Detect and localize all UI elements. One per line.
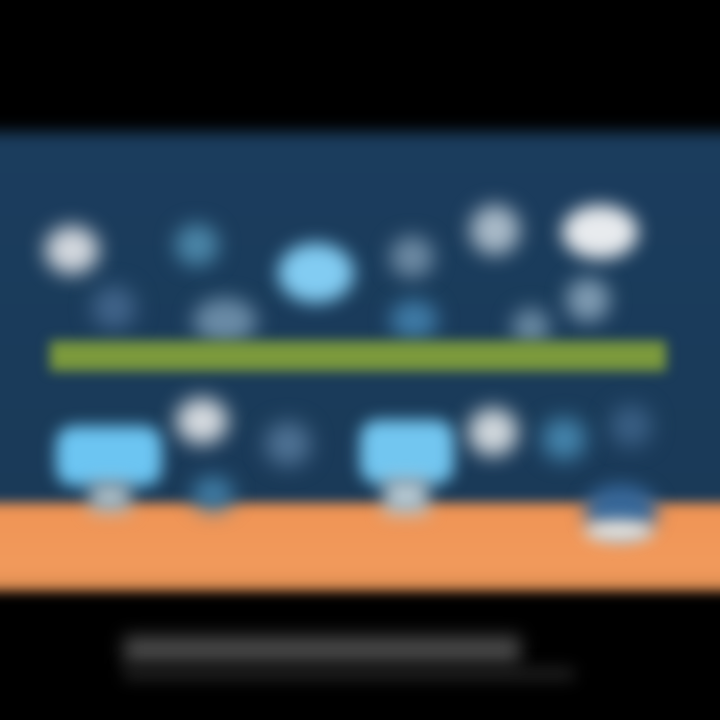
icon: pale node top right xyxy=(470,205,520,255)
icon: blue node top xyxy=(175,224,219,266)
icon: stand lower left xyxy=(90,482,130,512)
icon: blue node mid xyxy=(390,300,438,340)
icon: muted node left xyxy=(92,286,136,330)
timeline: green bar xyxy=(50,341,666,371)
icon: white node lower xyxy=(176,398,228,444)
icon: light blue box lower centre xyxy=(360,420,454,484)
icon: white cloud top right xyxy=(562,205,638,259)
icon: blue node lower right xyxy=(542,418,586,460)
icon: muted node far right xyxy=(610,405,652,447)
panel: navy background xyxy=(0,132,720,517)
icon: grey node lower xyxy=(265,422,311,466)
icon: bowl highlight xyxy=(584,520,654,542)
icon: grey node mid right xyxy=(512,308,550,346)
caption: blurred text line two xyxy=(124,668,574,680)
icon: light blue box lower left xyxy=(56,426,162,486)
icon: grey node upper right xyxy=(566,278,610,322)
icon: grey node mid left xyxy=(193,298,257,344)
icon: grey node top centre xyxy=(390,236,434,278)
icon: white node lower right xyxy=(468,408,518,456)
icon: stand lower centre xyxy=(384,478,428,514)
caption: blurred text line one xyxy=(124,636,520,664)
icon: light blue cloud xyxy=(278,243,354,303)
icon: blue node small lower xyxy=(192,476,234,512)
panel: orange band xyxy=(0,503,720,591)
icon: white node top left xyxy=(45,226,99,274)
icon: bowl on orange band xyxy=(584,484,658,536)
